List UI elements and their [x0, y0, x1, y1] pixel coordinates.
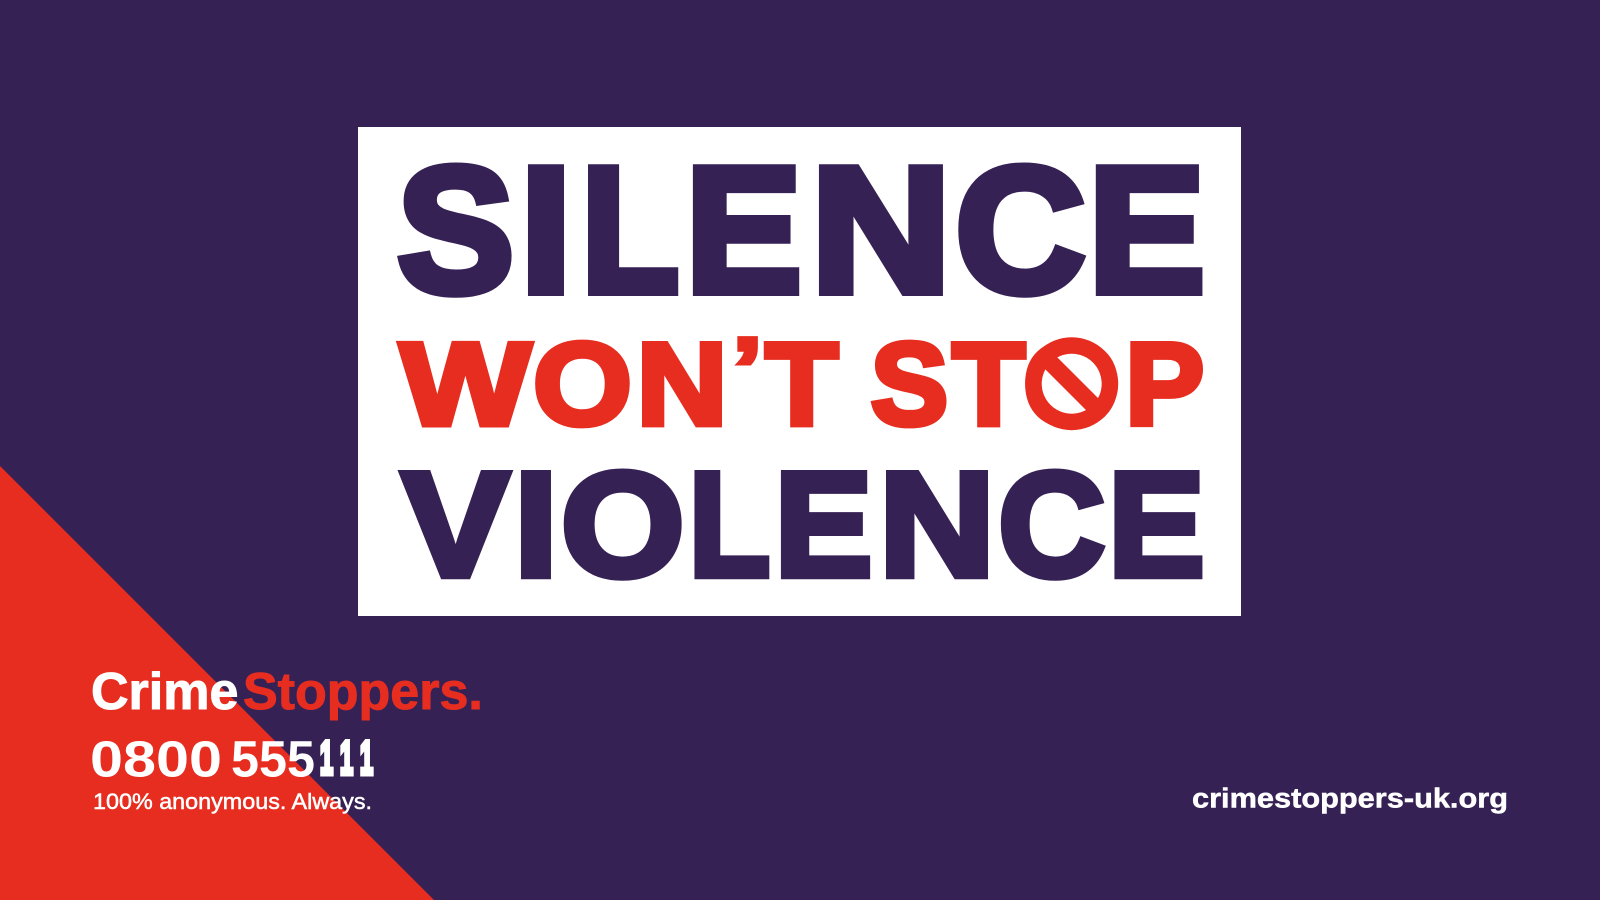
- heading line: VIOLENCE: L: [689, 442, 770, 608]
- heading line: WON'T STOP: W: [400, 319, 531, 450]
- heading line: SILENCE: [397, 131, 1205, 331]
- heading line: VIOLENCE: O: [561, 442, 684, 608]
- heading line: SILENCE: E: [1088, 131, 1205, 331]
- heading line: WON'T STOP: O: [1023, 319, 1120, 450]
- heading line: WON'T STOP: ’: [732, 319, 763, 419]
- heading line: VIOLENCE: E: [1108, 442, 1204, 608]
- tagline: 100% anonymous. Always.: [93, 789, 372, 814]
- red corner triangle: [0, 466, 434, 900]
- logo: CrimeStoppers wordmark: Crime: [91, 663, 238, 721]
- heading line: SILENCE: N: [811, 131, 951, 331]
- phone number: 555: [231, 730, 315, 788]
- panel: white slogan box: [358, 126, 1241, 616]
- heading line: SILENCE: E: [686, 131, 802, 331]
- heading line: VIOLENCE: I: [514, 442, 557, 608]
- heading line: WON'T STOP: T: [952, 319, 1025, 450]
- heading line: VIOLENCE: C: [998, 442, 1105, 608]
- logo: CrimeStoppers wordmark: Stoppers.: [243, 663, 483, 721]
- phone number: 111: [320, 731, 373, 784]
- phone number: 0800: [90, 730, 222, 788]
- heading line: SILENCE: C: [955, 131, 1085, 331]
- icon: prohibition sign in the O of STOP: [1025, 337, 1118, 430]
- heading line: WON'T STOP: S: [871, 319, 948, 450]
- heading line: WON'T STOP: O: [533, 319, 632, 450]
- heading line: VIOLENCE: N: [879, 442, 995, 608]
- website address: crimestoppers-uk.org: [1192, 782, 1508, 814]
- heading line: WON'T STOP: T: [765, 319, 838, 450]
- heading line: WON'T STOP: N: [637, 319, 727, 450]
- heading line: WON'T STOP: P: [1125, 319, 1204, 450]
- heading line: SILENCE: S: [397, 131, 514, 331]
- heading line: SILENCE: L: [581, 131, 679, 331]
- heading line: VIOLENCE: [398, 442, 1204, 608]
- heading line: SILENCE: I: [520, 131, 572, 331]
- heading line: VIOLENCE: V: [402, 442, 509, 608]
- heading line: VIOLENCE: E: [775, 442, 872, 608]
- heading line: WON'T STOP: [396, 319, 1204, 450]
